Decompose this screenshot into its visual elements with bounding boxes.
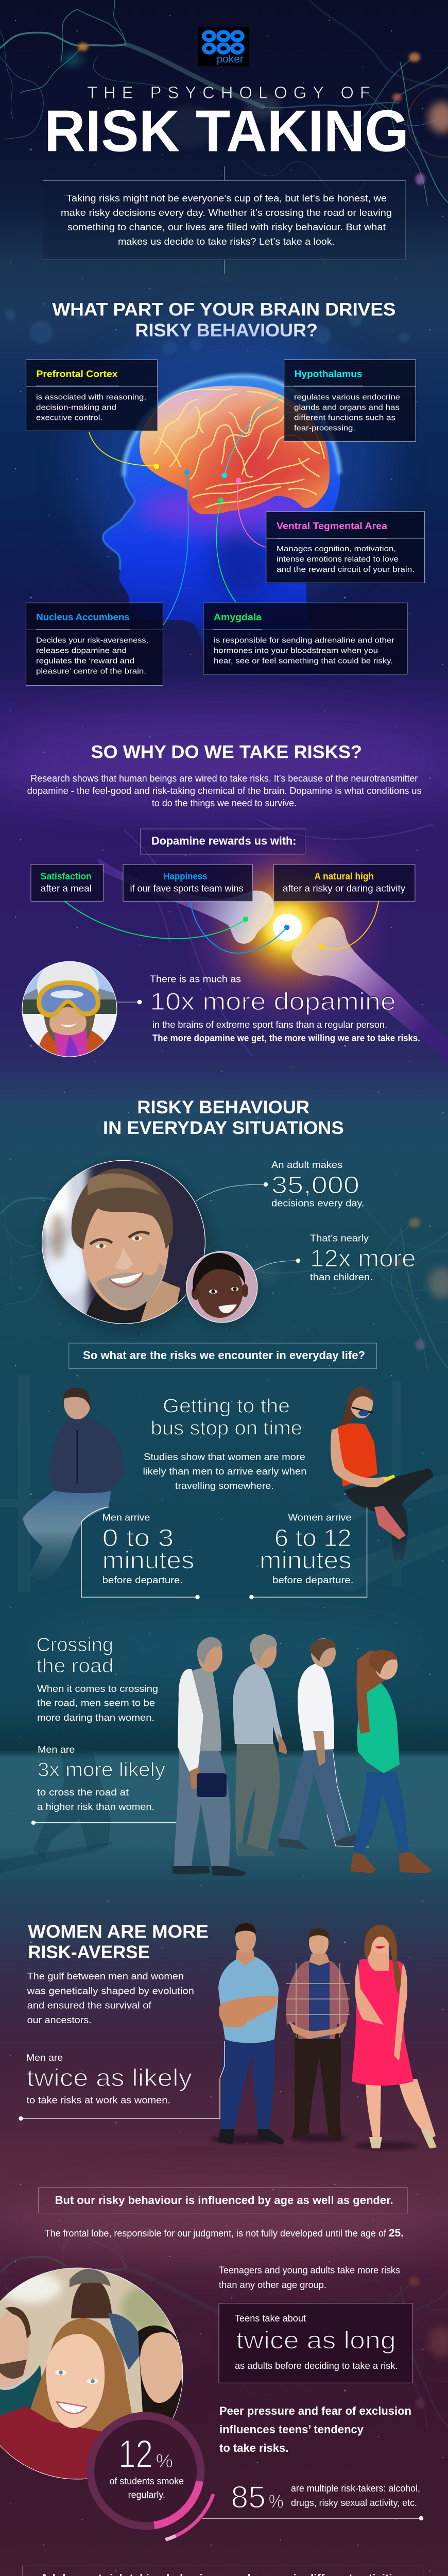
stat: men arrive: before departure. xyxy=(102,1575,183,1585)
intro text box: something to chance, our lives are filled with risky behaviour. But what xyxy=(67,222,386,232)
panel: happiness: Happiness xyxy=(164,871,207,882)
heading: crossing the road: Crossing xyxy=(36,1634,113,1656)
leader line: work stat xyxy=(19,2041,225,2121)
stat: women arrive xyxy=(260,1513,353,1585)
stat: 85% multiple risk-takers: 85 xyxy=(231,2480,266,2514)
stat: women arrive: before departure. xyxy=(272,1575,353,1585)
logo: 888 poker xyxy=(198,27,249,66)
woman: pink dress xyxy=(352,1925,437,2148)
stat: men arrive xyxy=(102,1513,194,1585)
photo: smiling adult man xyxy=(39,1159,214,1334)
panel: ventral tegmental area: Manages cognition, motivation, xyxy=(277,545,396,553)
text block: dopamine explanation xyxy=(27,773,422,808)
heading: what part of your brain: WHAT PART OF YOUR BRAIN DRIVES xyxy=(53,300,395,319)
panel: hypothalamus: fear-processing. xyxy=(294,423,355,432)
stat: men arrive: Men arrive xyxy=(102,1513,150,1523)
panel: ventral tegmental area xyxy=(266,512,425,583)
man walking: grey sweater xyxy=(233,1634,287,1856)
panel: satisfaction xyxy=(31,865,103,901)
text block: dopamine explanation: dopamine - the feel-good and risk-taking chemical of the brain. Dopamine is what conditions us xyxy=(27,786,422,796)
stat: twice as likely at work: twice as likely xyxy=(27,2064,193,2091)
stat: 3x more likely xyxy=(37,1744,165,1812)
frame lines around arrival stats xyxy=(81,1507,367,1599)
panel: twice as long: as adults before deciding to take a risk. xyxy=(235,2361,398,2371)
standing people xyxy=(211,1923,437,2150)
photo: group of teenagers xyxy=(0,2267,185,2488)
stat: 35,000 decisions: An adult makes xyxy=(271,1160,342,1170)
callout: dopamine rewards us with: Dopamine rewards us with: xyxy=(151,835,297,847)
panel: amygdala xyxy=(203,603,407,674)
stat: 10x more dopamine: There is as much as xyxy=(150,974,241,985)
synapse illustration xyxy=(98,819,448,1061)
stat: 10x more dopamine: in the brains of extreme sport fans than a regular person. xyxy=(152,1020,387,1030)
panel: hypothalamus xyxy=(284,360,416,441)
road backdrop with faint walker xyxy=(0,1700,448,1896)
text block: teenagers take more risks xyxy=(219,2265,400,2290)
heading: crossing the road: the road xyxy=(36,1655,114,1677)
stat: 10x more dopamine xyxy=(150,974,420,1043)
panel: hypothalamus: Hypothalamus xyxy=(295,369,363,379)
panel: nucleus accumbens xyxy=(26,603,163,686)
panel: amygdala: is responsible for sending adrenaline and other xyxy=(214,636,394,645)
callout: risks in everyday life xyxy=(69,1343,377,1368)
text block: gulf between men and women xyxy=(27,1971,194,2025)
stat: 35,000 decisions: 35,000 xyxy=(271,1171,359,1198)
stat: 3x more likely: Men are xyxy=(38,1744,75,1755)
stat: 10x more dopamine: 10x more dopamine xyxy=(150,988,396,1015)
panel: amygdala: hormones into your bloodstream when you xyxy=(214,646,378,655)
heading: women are more risk-averse: WOMEN ARE MORE xyxy=(28,1922,209,1942)
panel: satisfaction: Satisfaction xyxy=(41,871,92,882)
stat: twice as likely at work: to take risks at work as women. xyxy=(27,2095,170,2105)
text block: studies show xyxy=(143,1452,307,1491)
photo: skier with goggles xyxy=(21,958,118,1061)
panel: twice as long: Teens take about xyxy=(235,2313,306,2324)
stat: twice as likely at work xyxy=(26,2053,193,2105)
woman walking: green jacket xyxy=(350,1650,432,1873)
panel: prefrontal cortex: is associated with reasoning, xyxy=(36,393,146,401)
stat: 85% multiple risk-takers: are multiple risk-takers: alcohol, xyxy=(291,2483,420,2494)
heading: what part of your brain xyxy=(53,300,395,341)
text block: gulf between men and women: was genetically shaped by evolution xyxy=(27,1986,194,1996)
panel: nucleus accumbens: releases dopamine and xyxy=(36,646,127,655)
stat: 85% multiple risk-takers: drugs, risky sexual activity, etc. xyxy=(291,2498,417,2508)
text block: dopamine explanation: Research shows that human beings are wired to take risks. It’s because of the neurotransmitter xyxy=(30,773,418,784)
heading: getting to the bus stop on time xyxy=(150,1396,302,1439)
stat: 35,000 decisions: decisions every day. xyxy=(271,1198,365,1209)
logo: 888 poker: poker xyxy=(217,53,244,65)
person: man at bus stop xyxy=(23,1387,123,1582)
panel: amygdala: Amygdala xyxy=(214,612,262,622)
intro text box: Taking risks might not be everyone’s cup of tea, but let’s be honest, we xyxy=(66,193,387,204)
text block: peer pressure: Peer pressure and fear of exclusion xyxy=(219,2404,411,2417)
panel: satisfaction: after a meal xyxy=(41,884,92,894)
text block: teenagers take more risks: than any other age group. xyxy=(219,2280,326,2290)
text block: studies show: Studies show that women are more xyxy=(144,1452,305,1462)
heading: women are more risk-averse xyxy=(28,1922,209,1962)
panel: a natural high: A natural high xyxy=(314,871,374,882)
heading: so why do we take risks: SO WHY DO WE TAKE RISKS? xyxy=(91,742,362,762)
text block: studies show: likely than men to arrive early when xyxy=(143,1466,307,1477)
heading: risky behaviour in everyday situations: RISKY BEHAVIOUR xyxy=(137,1097,309,1117)
stat: 12% of students smoke: of students smoke xyxy=(110,2476,184,2486)
panel: twice as long: twice as long xyxy=(236,2327,396,2353)
panel: nucleus accumbens: pleasure’ centre of the brain. xyxy=(36,667,146,676)
intro text box: makes us decide to take risks? Let’s take a look. xyxy=(118,236,335,247)
stat: women arrive: Women arrive xyxy=(288,1513,352,1523)
stat: 12% of students smoke xyxy=(91,2416,213,2540)
stat: 12x more than children: 12x more xyxy=(310,1245,416,1272)
heading: what part of your brain: RISKY BEHAVIOUR? xyxy=(135,320,318,341)
stat: 12x more than children xyxy=(310,1233,416,1282)
text block: peer pressure xyxy=(219,2404,411,2454)
panel: ventral tegmental area: and the reward circuit of your brain. xyxy=(277,565,415,574)
stat: 3x more likely: to cross the road at xyxy=(37,1787,129,1798)
man walking: waistcoat and bag xyxy=(173,1637,246,1876)
stat: 35,000 decisions xyxy=(271,1160,365,1209)
intro text box: make risky decisions every day. Whether it’s crossing the road or leaving xyxy=(61,208,392,218)
stat: 85% multiple risk-takers: % xyxy=(269,2490,284,2512)
callout: age as well as gender xyxy=(38,2188,407,2213)
callout: adolescent risk-taking xyxy=(22,2566,423,2576)
panel: nucleus accumbens: Nucleus Accumbens xyxy=(36,612,130,622)
text block: peer pressure: influences teens’ tendency xyxy=(219,2423,364,2436)
heading: risky behaviour in everyday situations xyxy=(103,1097,344,1138)
text block: studies show: travelling somewhere. xyxy=(175,1481,274,1491)
panel: ventral tegmental area: Ventral Tegmental Area xyxy=(277,521,388,531)
brain illustration: head in profile xyxy=(77,325,386,690)
leader line: crossing stat xyxy=(31,1773,186,1825)
panel: hypothalamus: different functions such as xyxy=(294,413,395,422)
text block: frontal lobe: The frontal lobe, responsible for our judgment, is not fully developed until the age of 25. xyxy=(45,2227,404,2239)
heading: getting to the bus stop on time: Getting to the xyxy=(163,1396,290,1417)
panel: prefrontal cortex: decision-making and xyxy=(36,403,116,412)
panel: prefrontal cortex xyxy=(26,360,158,431)
stat: 10x more dopamine: The more dopamine we get, the more willing we are to take risks. xyxy=(152,1033,420,1043)
stat: 12% of students smoke: % xyxy=(156,2450,173,2471)
text block: crossing the road: When it comes to crossing xyxy=(37,1684,158,1694)
man: denim shirt xyxy=(218,1923,284,2145)
callout: age as well as gender: But our risky behaviour is influenced by age as well as gender. xyxy=(55,2194,393,2207)
panel: happiness xyxy=(123,865,253,901)
stat: 3x more likely: a higher risk than women. xyxy=(37,1802,154,1812)
man walking: white shirt xyxy=(279,1638,369,1850)
connector lines and dots on the brain xyxy=(89,396,283,625)
stat: 12x more than children: than children. xyxy=(310,1272,373,1282)
panel: a natural high: after a risky or daring activity xyxy=(283,884,405,894)
heading: risky behaviour in everyday situations: IN EVERYDAY SITUATIONS xyxy=(103,1118,344,1138)
stat: 85% multiple risk-takers xyxy=(202,2480,423,2520)
connectors: portraits to stats xyxy=(196,1182,300,1271)
title: RISK TAKING xyxy=(44,99,409,164)
panel: hypothalamus: regulates various endocrine xyxy=(294,393,400,401)
panel: a natural high xyxy=(274,865,415,901)
panel: ventral tegmental area: intense emotions related to love xyxy=(277,555,399,564)
panel: prefrontal cortex: executive control. xyxy=(36,413,102,422)
stat: men arrive: minutes xyxy=(102,1547,194,1573)
brain illustration: cortex xyxy=(140,386,330,514)
person: woman at bus stop xyxy=(331,1387,433,1561)
text block: dopamine explanation: to do the things we need to survive. xyxy=(152,798,297,808)
stat: men arrive: 0 to 3 xyxy=(102,1524,174,1551)
callout: dopamine rewards us with xyxy=(140,829,305,854)
text block: gulf between men and women: and ensured the survival of xyxy=(27,2000,152,2010)
heading: getting to the bus stop on time: bus stop on time xyxy=(150,1418,302,1439)
text block: gulf between men and women: The gulf between men and women xyxy=(27,1971,184,1981)
panel: amygdala: hear, see or feel something that could be risky. xyxy=(214,656,393,666)
panel: hypothalamus: glands and organs and has xyxy=(294,403,400,412)
callout: risks in everyday life: So what are the risks we encounter in everyday life? xyxy=(83,1349,365,1362)
connector: skier to stat xyxy=(117,1000,142,1004)
stat: 12% of students smoke: 12 xyxy=(118,2432,153,2476)
panel: nucleus accumbens: Decides your risk-averseness, xyxy=(36,636,148,645)
man: plaid shirt xyxy=(286,1928,350,2141)
text block: crossing the road: the road, men seem to be xyxy=(37,1698,155,1708)
text block: peer pressure: to take risks. xyxy=(219,2442,288,2454)
stat: women arrive: 6 to 12 xyxy=(274,1524,352,1551)
stat: women arrive: minutes xyxy=(260,1547,352,1573)
connector lines from rewards to synapse xyxy=(64,901,378,953)
panel: happiness: if our fave sports team wins xyxy=(130,884,243,894)
stat: 12x more than children: That’s nearly xyxy=(310,1233,369,1244)
text block: teenagers take more risks: Teenagers and young adults take more risks xyxy=(219,2265,400,2276)
panel: nucleus accumbens: regulates the ‘reward and xyxy=(36,656,134,666)
heading: crossing the road xyxy=(36,1634,114,1677)
photo: smiling child xyxy=(184,1251,260,1328)
text block: crossing the road: more daring than women. xyxy=(37,1713,154,1723)
panel: prefrontal cortex: Prefrontal Cortex xyxy=(36,369,117,379)
stat: 12% of students smoke: regularly. xyxy=(128,2489,165,2500)
stat: twice as likely at work: Men are xyxy=(26,2053,63,2063)
title: THE PSYCHOLOGY OF xyxy=(87,83,370,102)
text block: crossing the road xyxy=(37,1684,158,1723)
text block: gulf between men and women: our ancestors. xyxy=(27,2015,92,2025)
intro text box xyxy=(43,166,406,274)
stat: 3x more likely: 3x more likely xyxy=(38,1759,165,1781)
panel: twice as long xyxy=(219,2303,412,2383)
heading: women are more risk-averse: RISK-AVERSE xyxy=(28,1942,150,1962)
people crossing the road xyxy=(173,1634,432,1876)
